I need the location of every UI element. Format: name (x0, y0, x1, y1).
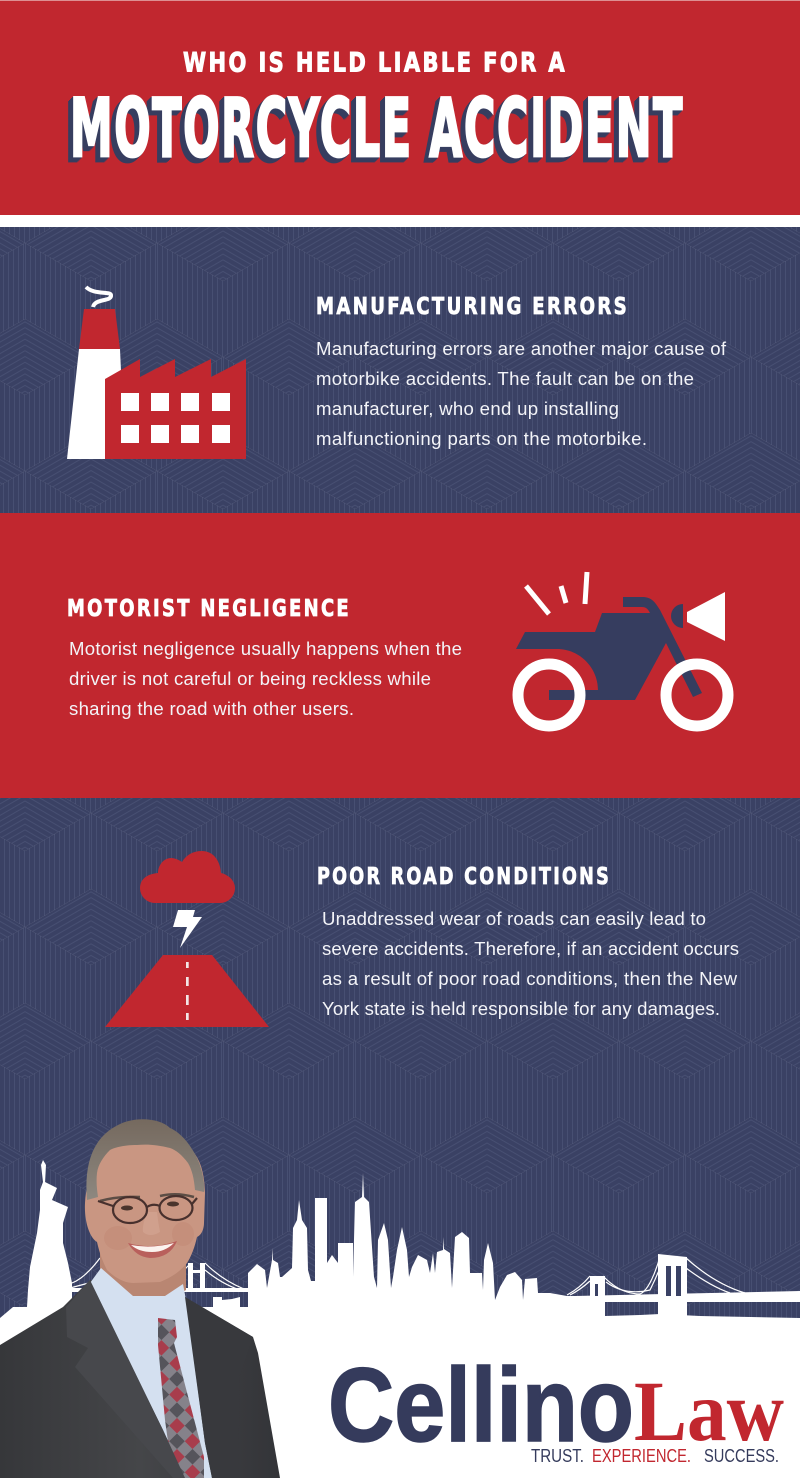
header panel (0, 0, 800, 215)
logo word: Cellino: Cellino (328, 1347, 634, 1464)
eyes (121, 1202, 179, 1210)
tie (158, 1318, 204, 1478)
text block: manufacturing errors: malfunctioning parts on the motorbike. (316, 428, 647, 449)
panel: poor road conditions (0, 798, 800, 1358)
tagline: EXPERIENCE. (592, 1445, 691, 1466)
text block: poor road conditions: Unaddressed wear of roads can easily lead to (322, 908, 706, 929)
hair (86, 1119, 204, 1200)
lapel left (66, 1280, 185, 1478)
portrait: attorney (0, 1119, 280, 1478)
panel: motorist negligence (0, 513, 800, 798)
glasses (98, 1196, 197, 1223)
subtitle: WHO IS HELD LIABLE FOR A (183, 48, 567, 78)
panel: manufacturing errors (0, 227, 800, 513)
text block: manufacturing errors: manufacturer, who end up installing (316, 398, 619, 419)
suit (0, 1280, 280, 1478)
text block: motorist negligence: driver is not careful or being reckless while (69, 668, 431, 689)
icon: factory (67, 287, 246, 459)
mouth (128, 1241, 177, 1258)
icon: motorcycle (516, 572, 728, 726)
text block: poor road conditions: severe accidents. Therefore, if an accident occurs (322, 938, 739, 959)
skyline (0, 1160, 800, 1478)
heading: motorist negligence: MOTORIST NEGLIGENCE (67, 594, 351, 622)
eyebrows (100, 1194, 194, 1201)
text block: manufacturing errors: motorbike accidents. The fault can be on the (316, 368, 694, 389)
tagline: SUCCESS. (704, 1445, 779, 1466)
tagline: TRUST. (531, 1445, 584, 1466)
text block: motorist negligence: sharing the road with other users. (69, 698, 354, 719)
lapel right (185, 1297, 253, 1478)
logo: Cellino Law (328, 1347, 784, 1466)
text block: poor road conditions: York state is held responsible for any damages. (322, 998, 720, 1019)
icon: storm cloud and road (105, 851, 269, 1027)
cheeks and nose shading (104, 1212, 194, 1250)
text block: poor road conditions: as a result of poor road conditions, then the New (322, 968, 738, 989)
neck (100, 1250, 186, 1318)
shirt (90, 1268, 212, 1478)
logo word: Law: Law (634, 1363, 784, 1459)
text block: manufacturing errors: Manufacturing errors are another major cause of (316, 338, 727, 359)
head (85, 1135, 205, 1283)
text block: motorist negligence: Motorist negligence usually happens when the (69, 638, 462, 659)
heading: manufacturing errors: MANUFACTURING ERRORS (316, 292, 629, 320)
heading: poor road conditions: POOR ROAD CONDITIONS (317, 862, 611, 890)
